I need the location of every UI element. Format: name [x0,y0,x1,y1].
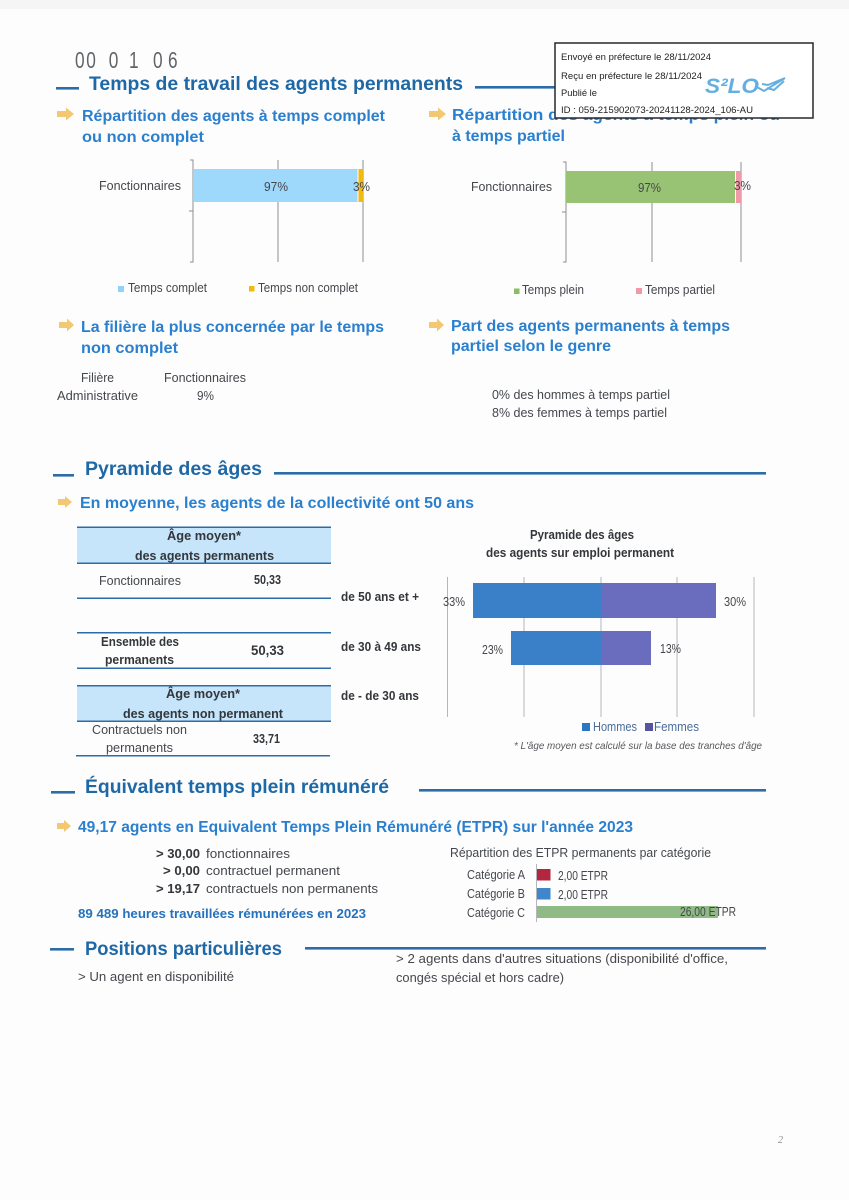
list: ETPR par statut: > 19,17 [156,882,200,896]
stamp: préfecture: Reçu en préfecture le 28/11/2024 [561,71,702,82]
list: ETPR par statut: contractuels non permanents [206,882,378,896]
section: temps de travail [56,74,780,420]
icon: arrow [429,318,444,332]
list: ETPR par statut: fonctionnaires [206,847,290,861]
subsection: filière: non complet [81,340,179,357]
subsection: temps plein [429,107,780,145]
chart: pyramide des âges: Femmes [654,720,699,734]
icon: arrow [429,108,446,120]
heading: temps de travail: Temps de travail des agents permanents [89,74,463,95]
chart title: Pyramide des âges [530,528,634,542]
text: parts par genre: 0% des hommes à temps partiel [492,388,670,402]
table: filière: Administrative [57,389,138,403]
text: parts par genre [492,388,670,420]
section: pyramide des âges [53,459,766,756]
table: âge moyen: 50,33 [251,643,284,658]
chart: temps complet: Fonctionnaires [99,179,181,193]
table: âge moyen: permanents [106,741,173,755]
chart: temps complet [99,160,370,295]
logo: S2LO [705,75,785,98]
chart: temps plein: Temps plein [522,283,584,297]
chart: temps complet: Temps non complet [258,281,358,295]
labels: tranches d'âge [341,590,421,703]
subheading: ETPR: 49,17 agents en Equivalent Temps Plein Rémunéré (ETPR) sur l'année 2023 [78,819,633,836]
heading: ETPR: Équivalent temps plein rémunéré [85,776,389,798]
chart: temps plein: 3% [734,179,751,193]
subsection: temps plein: à temps partiel [452,128,565,145]
chart: temps plein: Temps partiel [645,283,715,297]
chart: ETPR par catégorie: Catégorie A [467,868,526,882]
chart: pyramide des âges [443,528,754,734]
subheading: filière: La filière la plus concernée par le temps [81,319,384,336]
table: âge moyen: Ensemble des [101,635,179,649]
table: âge moyen: Âge moyen* [166,686,240,701]
page number: 2 [778,1135,783,1146]
subsection: genre: partiel selon le genre [451,338,611,355]
subsection: temps complet [57,108,386,146]
table: âge moyen: 50,33 [254,573,281,587]
chart: ETPR par catégorie: 26,00 ETPR [680,905,736,919]
icon: arrow [59,318,74,332]
text: autres situations: congés spécial et hors cadre) [396,971,564,985]
chart: temps complet: Temps complet [128,281,207,295]
stamp: préfecture: Envoyé en préfecture le 28/11/2024 [561,52,711,63]
labels: tranches d'âge: de 50 ans et + [341,590,419,604]
subsection: genre [429,318,730,420]
subheading: temps complet: Répartition des agents à temps complet [82,108,386,125]
table: âge moyen: des agents permanents [135,549,274,563]
subheading: temps plein: Répartition des agents à temps plein ou [452,107,780,124]
chart: pyramide des âges: 33% [443,595,465,609]
subheading: genre: Part des agents permanents à temps [451,318,730,335]
table: âge moyen: 33,71 [253,732,280,746]
footnote: * L'âge moyen est calculé sur la base des tranches d'âge [514,740,762,752]
stamp: préfecture: ID : 059-215902073-20241128-2024_106-AU [561,105,753,116]
chart: ETPR par catégorie: Répartition des ETPR permanents par catégorie [450,846,711,860]
stamp: préfecture: Publié le [561,88,597,99]
chart: ETPR par catégorie: 2,00 ETPR [558,888,608,902]
section: ETPR [51,776,766,922]
table: filière: Fonctionnaires [164,371,246,385]
table: âge moyen: permanents [105,653,174,667]
chart: ETPR par catégorie: Catégorie C [467,906,525,920]
chart: temps plein: 97% [638,181,661,195]
table: âge moyen: des agents non permanent [123,707,284,721]
text: disponibilité: > Un agent en disponibilité [78,970,234,984]
labels: tranches d'âge: de 30 à 49 ans [341,640,421,654]
logo: S2LO: S²LO [705,75,759,98]
table: âge moyen: Contractuels non [92,723,187,737]
text: autres situations: > 2 agents dans d'autres situations (disponibilité d'office, [396,952,728,966]
subsection: temps complet: ou non complet [82,129,205,146]
icon: arrow [58,496,72,508]
chart: temps complet: 97% [264,180,288,194]
list: ETPR par statut: > 0,00 [163,864,200,878]
callout: heures travaillées: 89 489 heures travaillées rémunérées en 2023 [78,906,366,921]
list: ETPR par statut: > 30,00 [156,847,200,861]
chart: ETPR par catégorie: 2,00 ETPR [558,869,608,883]
list: ETPR par statut: contractuel permanent [206,864,341,878]
chart: temps plein [471,162,751,297]
icon: arrow [57,108,74,120]
stamped number: 000106 [75,49,178,74]
chart: pyramide des âges: 23% [482,643,503,657]
table: âge moyen [76,526,331,756]
text: parts par genre: 8% des femmes à temps partiel [492,406,667,420]
text: autres situations [396,952,728,985]
heading: positions: Positions particulières [85,939,282,960]
chart title [486,528,675,560]
list: ETPR par statut [156,847,378,896]
section: positions particulières [50,939,766,985]
chart: pyramide des âges: 13% [660,642,681,656]
table: filière: 9% [197,389,214,403]
table: âge moyen: Fonctionnaires [99,574,181,588]
table: filière [57,371,246,403]
labels: tranches d'âge: de - de 30 ans [341,689,419,703]
chart: pyramide des âges: 30% [724,595,746,609]
subsection: filière [57,318,384,403]
icon: arrow [57,820,71,832]
chart title: des agents sur emploi permanent [486,546,675,560]
stamp: préfecture [555,43,813,118]
chart: temps complet: 3% [353,180,370,194]
table: filière: Filière [81,371,114,385]
heading: pyramide: Pyramide des âges [85,459,262,480]
chart: ETPR par catégorie [450,846,736,922]
chart: ETPR par catégorie: Catégorie B [467,887,525,901]
table: âge moyen: Âge moyen* [167,528,241,543]
chart: temps plein: Fonctionnaires [471,180,552,194]
chart: pyramide des âges: Hommes [593,720,637,734]
subheading: moyenne: En moyenne, les agents de la collectivité ont 50 ans [80,495,474,512]
